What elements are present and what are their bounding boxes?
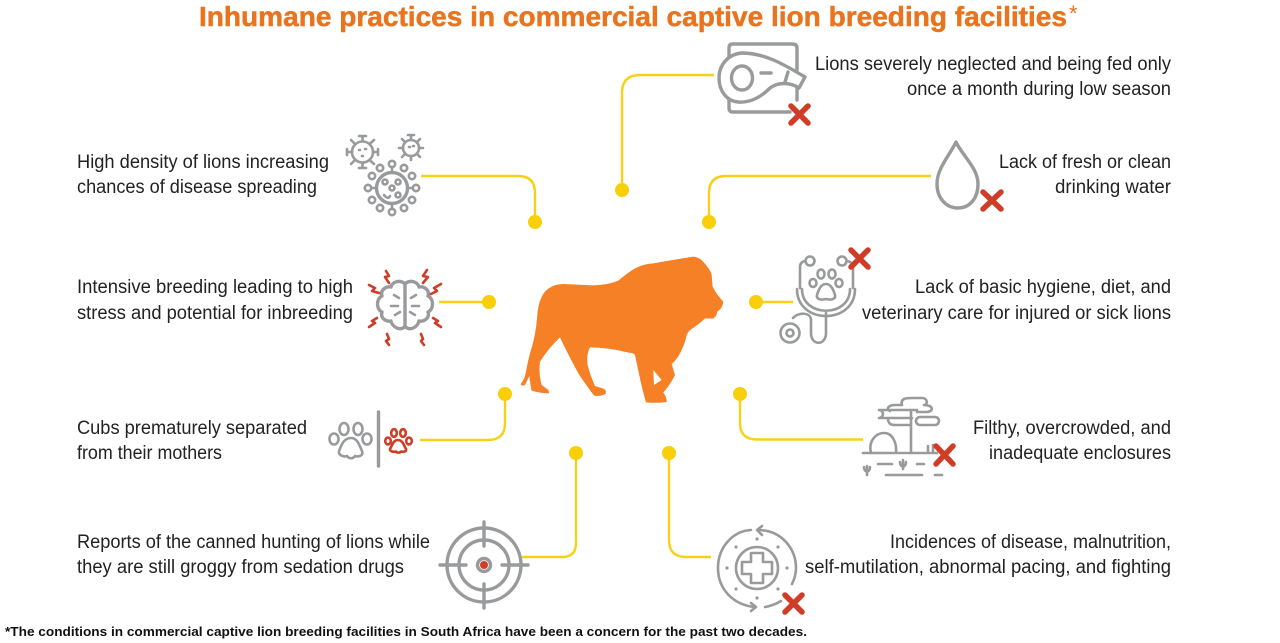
connector: stress xyxy=(439,295,496,309)
text: cubs: Cubs prematurely separated xyxy=(77,418,307,439)
title: * xyxy=(1069,1,1078,26)
text: enclosures xyxy=(973,418,1171,464)
connector: cubs xyxy=(420,387,512,440)
icon: meat with cross xyxy=(719,44,808,123)
icon: adult and cub paws xyxy=(330,412,412,466)
icon: medical cross circle with arrows xyxy=(718,526,802,612)
text: disease xyxy=(77,152,329,198)
connector: enclosures xyxy=(733,387,863,440)
icon: brain with stress bolts xyxy=(369,270,441,345)
text: veterinary: veterinary care for injured or sick lions xyxy=(862,303,1171,324)
icon: viruses xyxy=(347,135,423,215)
text: water: drinking water xyxy=(1055,177,1172,198)
text: disease: High density of lions increasing xyxy=(77,152,329,173)
text: stress: Intensive breeding leading to high xyxy=(77,277,353,298)
icon: hunting crosshair target xyxy=(440,522,528,608)
icon: enclosure landscape with cross xyxy=(863,398,953,475)
connector: hunting xyxy=(522,446,583,557)
connector: medical xyxy=(662,446,711,557)
connector: veterinary xyxy=(749,295,793,309)
text: water: Lack of fresh or clean xyxy=(999,152,1171,173)
text: medical: Incidences of disease, malnutrition, xyxy=(890,532,1171,553)
lion silhouette xyxy=(521,257,723,403)
icon: water drop with cross xyxy=(937,142,1001,209)
text: medical xyxy=(805,532,1171,578)
text: stress xyxy=(77,277,353,324)
text: enclosures: Filthy, overcrowded, and xyxy=(973,418,1171,439)
text: medical: self-mutilation, abnormal pacing, and fighting xyxy=(805,557,1171,578)
text: cubs: from their mothers xyxy=(77,443,222,464)
title: Inhumane practices in commercial captive lion breeding facilities xyxy=(199,1,1067,32)
icon: stethoscope with paw xyxy=(780,250,868,343)
text: hunting xyxy=(77,532,430,578)
text: hunting: Reports of the canned hunting of lions while xyxy=(77,532,430,553)
text: disease: chances of disease spreading xyxy=(77,177,317,198)
text: cubs xyxy=(77,418,307,464)
text: food xyxy=(815,54,1171,100)
text: hunting: they are still groggy from sedation drugs xyxy=(77,557,404,578)
text: veterinary xyxy=(862,277,1171,324)
text: water xyxy=(999,152,1172,198)
connector: water xyxy=(702,176,931,229)
text: food: Lions severely neglected and being fed only xyxy=(815,54,1171,75)
footnote: *The conditions in commercial captive lion breeding facilities in South Africa have been a concern for the past two decades. xyxy=(5,624,807,639)
text: veterinary: Lack of basic hygiene, diet, and xyxy=(915,277,1171,298)
connector: food xyxy=(615,75,714,197)
text: food: once a month during low season xyxy=(907,79,1171,100)
text: enclosures: inadequate enclosures xyxy=(989,443,1171,464)
text: stress: stress and potential for inbreeding xyxy=(77,303,353,324)
connector: disease xyxy=(421,176,542,229)
